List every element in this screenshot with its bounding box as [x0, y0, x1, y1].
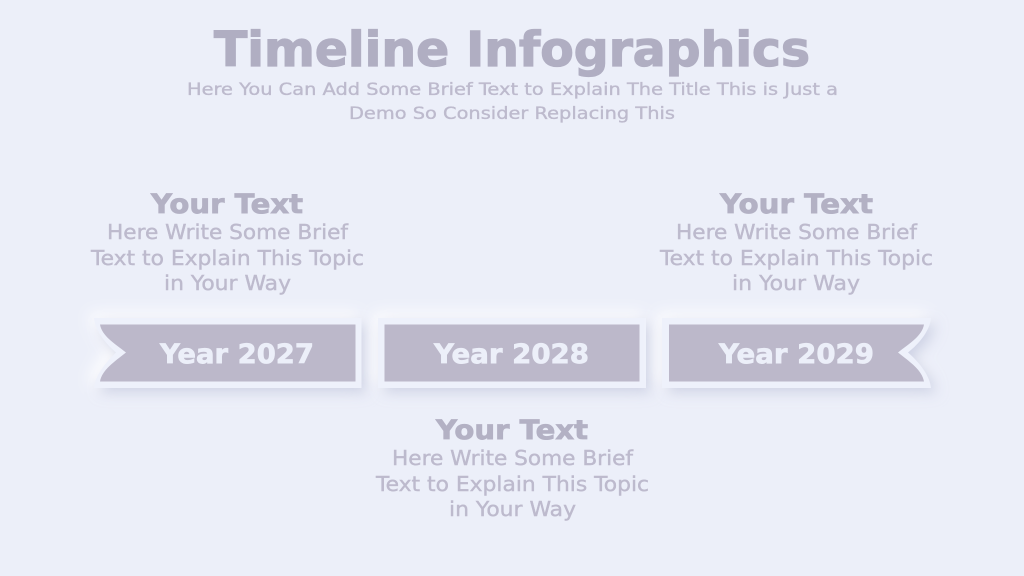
text block: middle topic: Your Text	[435, 415, 588, 446]
text block: left topic: Your Text	[150, 189, 303, 220]
ribbon: Year 2028: Year 2028	[433, 339, 589, 370]
title: Timeline Infographics	[214, 22, 810, 78]
text block: middle topic: Here Write Some Brief	[392, 446, 634, 470]
subtitle	[187, 80, 838, 124]
text block: middle topic: in Your Way	[449, 497, 576, 521]
text block: right topic: Your Text	[719, 189, 873, 220]
ribbon: Year 2029	[662, 318, 931, 388]
text block: left topic	[90, 189, 364, 295]
subtitle: Demo So Consider Replacing This	[349, 104, 675, 124]
text block: right topic: Here Write Some Brief	[676, 220, 918, 244]
text block: middle topic: Text to Explain This Topic	[375, 472, 649, 496]
ribbon: Year 2027	[94, 318, 362, 388]
text block: right topic	[659, 189, 933, 295]
text block: right topic: Text to Explain This Topic	[659, 246, 933, 270]
ribbon: Year 2028	[378, 318, 646, 388]
text block: middle topic	[375, 415, 649, 521]
ribbon: Year 2029: Year 2029	[718, 339, 874, 370]
text block: right topic: in Your Way	[732, 271, 860, 295]
ribbon: Year 2027: Year 2027	[159, 339, 314, 370]
text block: left topic: Here Write Some Brief	[107, 220, 349, 244]
text block: left topic: Text to Explain This Topic	[90, 246, 364, 270]
text block: left topic: in Your Way	[164, 271, 291, 295]
subtitle: Here You Can Add Some Brief Text to Explain The Title This is Just a	[187, 80, 838, 100]
